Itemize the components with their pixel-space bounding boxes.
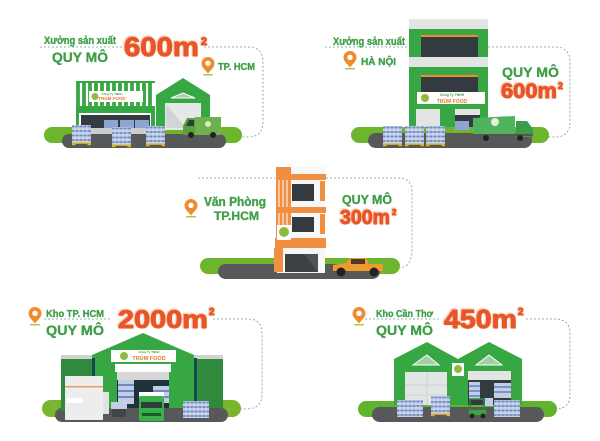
area: 2000m [118, 306, 208, 334]
panel: Văn phòng TP.HCM [184, 167, 412, 279]
area: 300m [340, 207, 390, 229]
icon: location pin [184, 199, 198, 218]
label: QUY MÔ [376, 321, 433, 338]
area: 450m [444, 304, 517, 334]
green warehouse [156, 78, 210, 130]
label: QUY MÔ [46, 321, 104, 338]
multi-storey factory [409, 19, 488, 130]
green truck [473, 116, 533, 141]
superscript: 2 [392, 208, 397, 217]
icon: location pin [344, 51, 356, 70]
dashed connector [198, 178, 412, 268]
pallets [397, 382, 520, 417]
pallets [72, 125, 165, 147]
company sign: TRÙM FOOD [437, 98, 468, 105]
grass and road [358, 401, 557, 422]
pallets [111, 380, 209, 418]
dashed connector [325, 47, 570, 137]
heading: Xưởng sản xuất [333, 36, 405, 48]
pickup truck [333, 258, 383, 276]
label: QUY MÔ [52, 48, 108, 65]
twin warehouses [394, 342, 522, 405]
company sign [417, 92, 485, 105]
icon: location pin [28, 307, 42, 326]
box truck [65, 376, 109, 420]
front-view green truck [139, 392, 164, 421]
striped factory building [76, 81, 155, 134]
location: Kho Cần Thơ [376, 308, 433, 320]
location: TP. HCM [218, 62, 255, 73]
company sign: TRÙM FOOD [132, 355, 166, 362]
superscript: 2 [518, 307, 524, 318]
heading: Xưởng sản xuất [44, 35, 116, 47]
superscript: 2 [201, 36, 207, 48]
company sign: Công Ty TNHH [102, 92, 122, 96]
dashed connector [40, 47, 263, 137]
panel: Kho TP. HCM [28, 306, 262, 422]
delivery van [183, 117, 221, 138]
grass and road [351, 127, 549, 148]
grass and road [44, 127, 242, 148]
location: Kho TP. HCM [46, 308, 104, 320]
panel: Xưởng sản xuất Hà Nội [325, 19, 570, 148]
company sign [89, 91, 143, 102]
company sign [111, 350, 176, 362]
superscript: 2 [209, 307, 215, 318]
superscript: 2 [558, 81, 563, 91]
company sign: Công Ty TNHH [440, 93, 465, 97]
company sign: Công Ty TNHH [139, 350, 159, 354]
area: 600m [124, 32, 199, 62]
office name [204, 195, 266, 223]
grass and road [42, 400, 241, 422]
large warehouse [61, 333, 223, 411]
panel: Kho Cần Thơ [352, 304, 570, 422]
label: QUY MÔ [342, 192, 392, 207]
forklift [469, 399, 486, 418]
area: 600m [501, 80, 557, 103]
dashed connector [365, 319, 570, 409]
office name: Văn Phòng [204, 195, 266, 209]
panel: Xưởng sản xuất TP. HCM [40, 32, 263, 148]
pallets [383, 126, 445, 146]
dashed connector [44, 319, 262, 409]
location: HÀ NỘI [361, 55, 396, 68]
icon: location pin [202, 57, 214, 76]
label: QUY MÔ [502, 63, 559, 80]
office name: TP.HCM [214, 209, 259, 223]
orange office building [274, 167, 326, 273]
grass and road [200, 258, 400, 279]
icon: location pin [352, 307, 366, 326]
company sign: TRÙM FOOD [98, 95, 126, 101]
